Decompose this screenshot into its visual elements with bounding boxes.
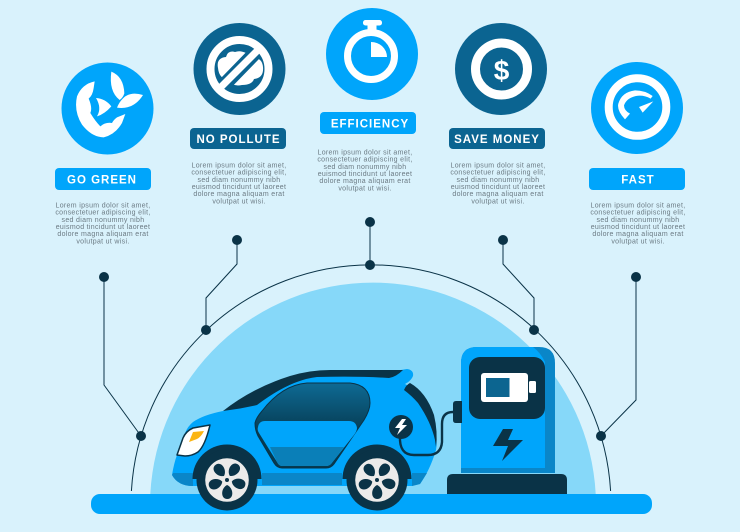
- charge port: [389, 415, 413, 439]
- door shade: [270, 447, 344, 466]
- icon: crossed-out cloud: [194, 23, 286, 115]
- icon: lightning bolt: [493, 429, 523, 461]
- text block: fast: Lorem ipsum dolor sit amet,: [590, 202, 686, 210]
- text block: efficiency: consectetuer adipiscing elit,: [317, 157, 413, 164]
- connector arc and lines: [99, 217, 641, 491]
- dome backdrop: [150, 283, 596, 494]
- text block: fast: consectetuer adipiscing elit,: [590, 210, 686, 217]
- text block: save money: dolore magna aliquam erat: [452, 191, 544, 198]
- text block: efficiency: sed diam nonummy nibh: [324, 164, 406, 171]
- text block: efficiency: Lorem ipsum dolor sit amet,: [317, 150, 413, 156]
- text block: no pollute: sed diam nonummy nibh: [198, 177, 280, 184]
- charger screen: [469, 357, 545, 419]
- text block: go green: dolore magna aliquam erat: [57, 231, 149, 238]
- front wheel: [192, 444, 262, 510]
- label: no pollute: NO POLLUTE: [196, 134, 281, 146]
- text block: go green: volutpat ut wisi.: [76, 238, 130, 245]
- car window: [255, 383, 370, 468]
- text block: go green: [55, 202, 151, 245]
- text block: fast: euismod tincidunt ut laoreet: [591, 224, 685, 231]
- text block: fast: [590, 202, 686, 245]
- label: save money: SAVE MONEY: [454, 134, 540, 146]
- charging cable: [400, 412, 453, 455]
- icon: speedometer: [591, 62, 683, 154]
- text block: no pollute: Lorem ipsum dolor sit amet,: [191, 162, 287, 170]
- panel: save money: [449, 23, 547, 205]
- battery icon: [481, 373, 536, 402]
- label: fast: [589, 168, 685, 190]
- text block: no pollute: dolore magna aliquam erat: [193, 191, 285, 198]
- car roof: [223, 370, 403, 411]
- text block: go green: euismod tincidunt ut laoreet: [56, 224, 150, 231]
- text block: go green: Lorem ipsum dolor sit amet,: [55, 202, 151, 210]
- charger base: [447, 474, 567, 494]
- rear wheel: [342, 444, 412, 510]
- text block: go green: consectetuer adipiscing elit,: [55, 210, 151, 217]
- icon: globe with leaves: [62, 62, 154, 154]
- label: go green: GO GREEN: [67, 174, 137, 186]
- text block: efficiency: dolore magna aliquam erat: [319, 178, 411, 185]
- icon: stopwatch: [326, 8, 418, 100]
- text block: save money: consectetuer adipiscing elit,: [450, 170, 546, 177]
- text block: save money: sed diam nonummy nibh: [457, 177, 539, 184]
- label: go green: [55, 168, 151, 190]
- panel: go green: [55, 62, 154, 245]
- charger body: [461, 347, 555, 473]
- headlight: [177, 425, 210, 456]
- text block: no pollute: consectetuer adipiscing elit,: [191, 170, 287, 177]
- label: efficiency: EFFICIENCY: [331, 118, 409, 130]
- label: fast: FAST: [621, 174, 655, 186]
- text block: fast: volutpat ut wisi.: [611, 238, 665, 245]
- text block: save money: euismod tincidunt ut laoreet: [451, 184, 545, 191]
- text block: efficiency: volutpat ut wisi.: [338, 185, 392, 192]
- panel: fast: [589, 62, 686, 245]
- text block: fast: dolore magna aliquam erat: [592, 231, 684, 238]
- text block: efficiency: [317, 150, 413, 192]
- ground bar: [91, 494, 652, 514]
- label: no pollute: [190, 128, 286, 149]
- text block: save money: [450, 162, 546, 205]
- lower body shade: [172, 473, 427, 486]
- label: save money: [449, 128, 545, 149]
- text block: no pollute: [191, 162, 287, 205]
- text block: fast: sed diam nonummy nibh: [597, 217, 679, 224]
- text block: no pollute: euismod tincidunt ut laoreet: [192, 184, 286, 191]
- charger plug socket: [453, 401, 462, 423]
- label: efficiency: [320, 112, 416, 134]
- car body: [172, 369, 437, 486]
- text block: go green: sed diam nonummy nibh: [62, 217, 144, 224]
- charging station: [447, 347, 567, 494]
- text block: efficiency: euismod tincidunt ut laoreet: [318, 171, 412, 178]
- text block: save money: Lorem ipsum dolor sit amet,: [450, 162, 546, 170]
- icon: dollar coin: $: [494, 55, 510, 86]
- panel: efficiency: [317, 8, 418, 192]
- text block: save money: volutpat ut wisi.: [471, 198, 525, 205]
- panel: no pollute: [190, 23, 287, 205]
- text block: no pollute: volutpat ut wisi.: [212, 198, 266, 205]
- car door: [258, 421, 357, 466]
- electric car: [172, 369, 453, 510]
- icon: dollar coin: [455, 23, 547, 115]
- rear stripe: [404, 383, 437, 447]
